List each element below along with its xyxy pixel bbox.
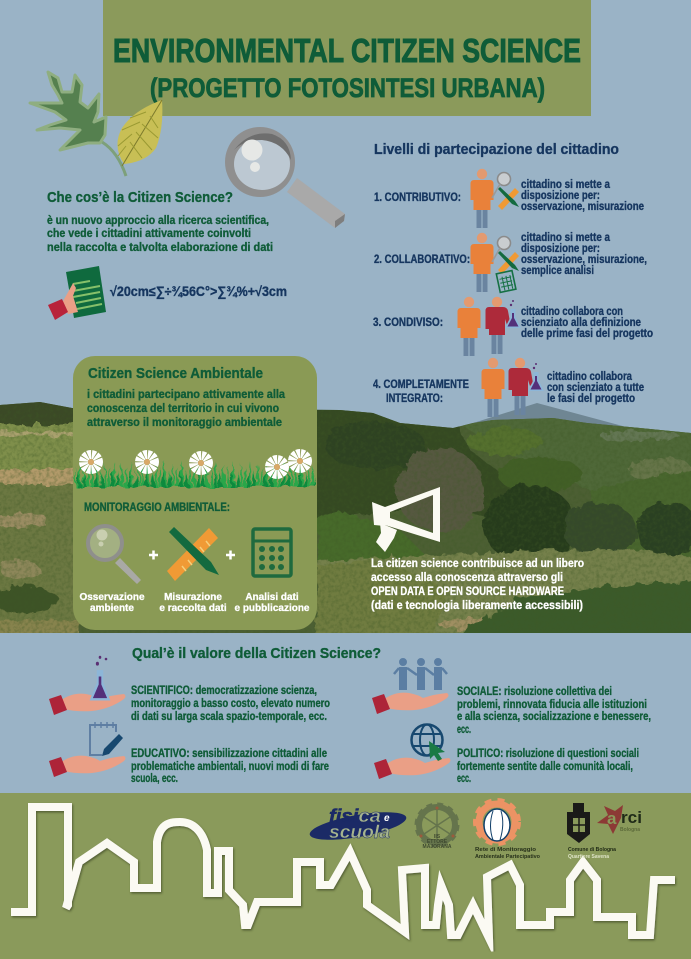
logo: IIS Ettore Majorana	[416, 804, 458, 850]
plus sign	[149, 550, 158, 560]
title block: ENVIRONMENTAL CITIZEN SCIENCE	[113, 32, 581, 69]
logo: rete di monitoraggio: Rete di Monitoraggio	[475, 847, 537, 853]
level 1: contributivo: osservazione, misurazione	[521, 201, 644, 213]
level 1: contributivo	[374, 169, 644, 228]
level 3: condiviso: 3. CONDIVISO:	[373, 317, 443, 329]
text: definition: nella raccolta e talvolta elaborazione di dati	[47, 242, 273, 254]
text: definition: è un nuovo approccio alla ricerca scientifica,	[47, 215, 269, 227]
text: scientifico: SCIENTIFICO: democratizzazione scienza,	[131, 685, 317, 697]
formula: √20cm≤∑÷¾56C°>∑¾%+√3cm	[110, 284, 287, 299]
text: open data message: OPEN DATA E OPEN SOURCE HARDWARE	[371, 586, 564, 598]
level 4: completamente integrato: le fasi del progetto	[547, 393, 635, 405]
icon: hand with flask	[49, 656, 126, 715]
text: scientifico: monitoraggio a basso costo, elevato numero	[131, 698, 330, 710]
icon: megaphone	[372, 487, 440, 552]
footer band	[0, 793, 691, 959]
level 2: collaborativo: osservazione, misurazione,	[521, 254, 647, 266]
level 1: contributivo: cittadino si mette a	[521, 179, 611, 191]
panel: citizen science ambientale	[73, 356, 317, 630]
level 3: condiviso: scienziato alla definizione	[521, 317, 641, 329]
panel text: attraverso il monitoraggio ambientale	[87, 417, 282, 429]
logo: comune di bologna: Comune di Bologna	[568, 847, 617, 853]
daisies	[84, 454, 308, 474]
heading: participation levels: Livelli di partecipazione del cittadino	[374, 141, 619, 158]
level 2: collaborativo: disposizione per:	[521, 243, 600, 255]
text: educativo: EDUCATIVO: sensibilizzazione cittadini alle	[131, 748, 327, 760]
panel text: conoscenza del territorio in cui vivono	[87, 403, 279, 415]
monitoring heading: MONITORAGGIO AMBIENTALE:	[84, 502, 230, 514]
level 3: condiviso	[373, 297, 653, 356]
logo: fisica e scuola	[308, 806, 408, 845]
caption: observation: ambiente	[90, 603, 134, 614]
icon: magnifier	[88, 526, 141, 584]
text: open data message: accesso alla conoscenza attraverso gli	[371, 572, 563, 584]
title block	[103, 0, 591, 116]
logo: rete di monitoraggio: Ambientale Partecipativo	[475, 854, 541, 860]
icon: hand with globe	[374, 724, 450, 779]
text: open data message: (dati e tecnologia liberamente accessibili)	[371, 600, 583, 612]
panel text	[87, 389, 286, 429]
icon: small calculator	[496, 271, 516, 292]
caption: analysis: e pubblicazione	[234, 603, 310, 614]
text: politico	[457, 748, 639, 785]
caption: measurement: e raccolta dati	[159, 603, 227, 614]
caption: analysis	[234, 592, 310, 614]
text: educativo	[131, 748, 329, 785]
level 2: collaborativo: semplice analisi	[521, 265, 594, 277]
title block: (PROGETTO FOTOSINTESI URBANA)	[150, 73, 545, 103]
panel text: i cittadini partecipano attivamente alla	[87, 389, 286, 401]
logo: comune di bologna	[567, 803, 617, 860]
logo: IIS Ettore Majorana: IIS	[434, 834, 441, 840]
text: sociale: e alla scienza, socializzazione e benessere,	[457, 711, 651, 723]
heading: value of citizen science: Qual’è il valore della Citizen Science?	[132, 645, 381, 662]
text: sociale: problemi, rinnovata fiducia alle istituzioni	[457, 699, 647, 711]
grass strip	[75, 460, 316, 487]
logo: fisica e scuola: scuola	[329, 822, 390, 842]
logo: rete di monitoraggio	[475, 800, 541, 860]
icon: pencil and ruler	[167, 527, 219, 581]
text: educativo: problematiche ambientali, nuovi modi di fare	[131, 761, 329, 773]
level 4: completamente integrato	[373, 358, 644, 417]
caption: observation	[79, 592, 145, 614]
logo: arci bologna: rci	[621, 808, 642, 827]
text: definition	[47, 215, 273, 254]
text: educativo: scuola, ecc.	[131, 773, 178, 785]
icon: oak leaf	[30, 72, 126, 176]
level 4: completamente integrato: INTEGRATO:	[386, 393, 443, 405]
text: sociale	[457, 686, 651, 736]
text: open data message	[371, 558, 584, 612]
logo: comune di bologna: Quartiere Savena	[568, 854, 610, 860]
icon: hand with people	[372, 658, 448, 714]
level 1: contributivo: disposizione per:	[521, 190, 600, 202]
text: politico: POLITICO: risoluzione di questioni sociali	[457, 748, 639, 760]
level 4: completamente integrato: cittadino collabora	[547, 371, 632, 383]
landscape photograph	[0, 398, 691, 640]
caption: measurement: Misurazione	[164, 592, 222, 603]
icon: big magnifying glass	[225, 127, 345, 228]
icon: hand with notebook	[49, 722, 126, 777]
level 4: completamente integrato: con scienziato a tutte	[547, 382, 644, 394]
level 4: completamente integrato: 4. COMPLETAMENTE	[373, 379, 469, 391]
level 2: collaborativo	[374, 232, 647, 292]
logo: arci bologna	[597, 805, 642, 834]
logo: fisica e scuola: fisica	[329, 806, 381, 826]
panel heading: Citizen Science Ambientale	[88, 365, 263, 382]
text: politico: fortemente sentite dalle comunità locali,	[457, 761, 633, 773]
logo: arci bologna: a	[607, 809, 617, 828]
icon: hand holding document	[48, 266, 106, 320]
logo: IIS Ettore Majorana: ETTORE	[427, 839, 448, 845]
level 1: contributivo: 1. CONTRIBUTIVO:	[374, 192, 461, 204]
caption: analysis: Analisi dati	[245, 592, 299, 603]
plus sign	[226, 550, 235, 560]
city skyline outline	[11, 807, 675, 938]
icon: yellow leaf	[117, 100, 162, 166]
logo: arci bologna: Bologna	[620, 827, 640, 833]
text: sociale: SOCIALE: risoluzione collettiva dei	[457, 686, 612, 698]
level 3: condiviso: cittadino collabora con	[521, 306, 623, 318]
logo: fisica e scuola: e	[384, 813, 390, 824]
level 2: collaborativo: 2. COLLABORATIVO:	[374, 254, 470, 266]
text: politico: ecc.	[457, 773, 471, 785]
lower value band	[0, 633, 691, 793]
level 3: condiviso: delle prime fasi del progetto	[521, 328, 653, 340]
text: scientifico	[131, 685, 330, 723]
text: definition: che vede i cittadini attivamente coinvolti	[47, 228, 251, 240]
caption: measurement	[159, 592, 227, 614]
level 2: collaborativo: cittadino si mette a	[521, 232, 611, 244]
icon: calculator	[253, 529, 291, 576]
text: scientifico: di dati su larga scala spazio-temporale, ecc.	[131, 711, 327, 723]
logo: IIS Ettore Majorana: MAJORANA	[423, 844, 452, 850]
caption: observation: Osservazione	[79, 592, 145, 603]
text: open data message: La citizen science contribuisce ad un libero	[371, 558, 584, 570]
text: sociale: ecc.	[457, 724, 471, 736]
heading: what is citizen science: Che cos’è la Citizen Science?	[47, 189, 233, 206]
